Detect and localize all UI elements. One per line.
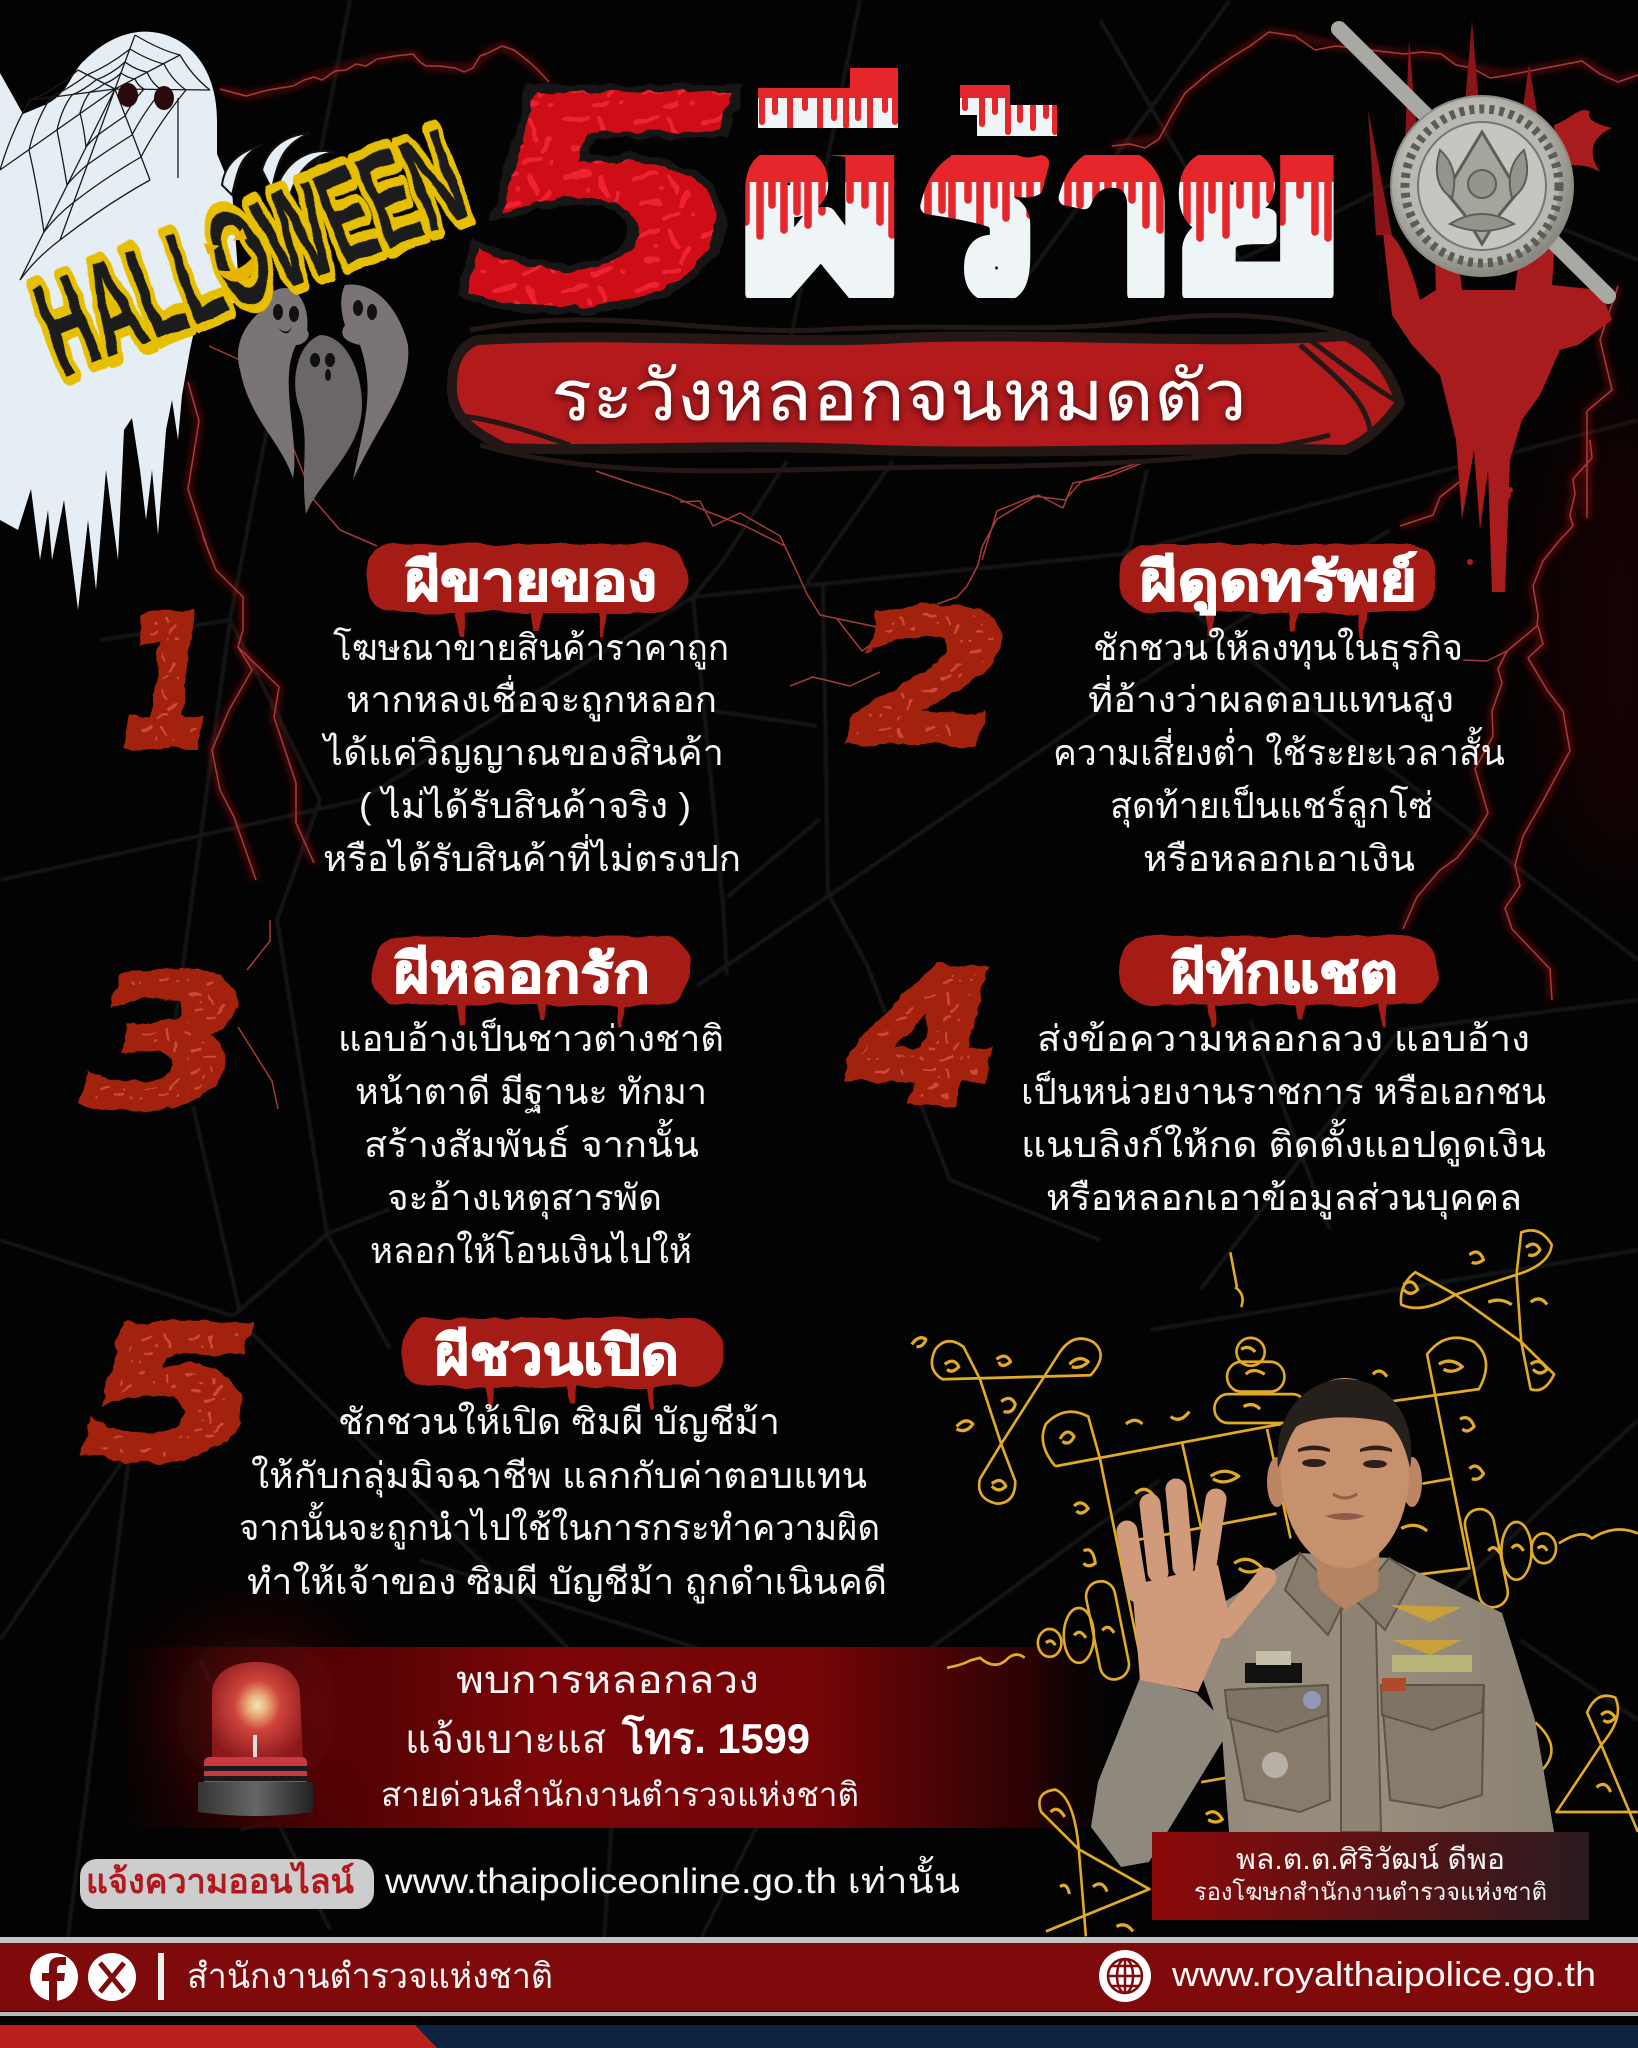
hair (1277, 1379, 1411, 1468)
body 1: โฆษณาขายสินค้าราคาถูก (333, 627, 729, 670)
pumpkin face (204, 227, 263, 289)
body 3: จะอ้างเหตุสารพัด (387, 1177, 662, 1220)
body 4: เป็นหน่วยงานราชการ หรือเอกชน (1021, 1069, 1546, 1112)
icon: facebook (30, 1953, 78, 2001)
panel 5 (84, 1291, 887, 1604)
body 3 (338, 1016, 724, 1271)
halloween badge (17, 103, 484, 404)
small grey ghosts (238, 284, 408, 514)
panel 4 (849, 935, 1546, 1220)
footer (0, 1937, 1638, 2048)
title letters: ผี (741, 80, 902, 340)
heading 5: ผีชวนเปิด (435, 1326, 679, 1386)
body 2 (1053, 627, 1505, 879)
body 2: สุดท้ายเป็นแชร์ลูกโซ่ (1110, 783, 1433, 828)
body 1: ได้แค่วิญญาณของสินค้า (321, 732, 724, 773)
name plate (1152, 1832, 1589, 1920)
sword (1339, 29, 1608, 296)
panel 3 (84, 936, 724, 1271)
red lightning lines (188, 32, 1638, 1109)
raised sleeve (1091, 1678, 1225, 1867)
hotline text (381, 1659, 859, 1813)
title letters: ร้ (921, 80, 1043, 340)
position: รองโฆษกสำนักงานตำรวจแห่งชาติ (1194, 1878, 1547, 1906)
yantra drawing (912, 1230, 1638, 1936)
body 1: หรือได้รับสินค้าที่ไม่ตรงปก (323, 834, 741, 879)
online report url: www.thaipoliceonline.go.th เท่านั้น (384, 1855, 960, 1901)
number 1: 1 (122, 578, 214, 787)
body 5: ให้กับกลุ่มมิจฉาชีพ แลกกับค่าตอบแทน (251, 1455, 867, 1498)
hand (1127, 1489, 1266, 1692)
body 1: ( ไม่ได้รับสินค้าจริง ) (359, 785, 691, 826)
icon: red siren (171, 1635, 341, 1816)
pockets and placket (1225, 1553, 1484, 1832)
heading 4: ผีทักแชต (1171, 944, 1398, 1004)
ears (1267, 1457, 1422, 1507)
hotline band (120, 1647, 1110, 1828)
number 3: 3 (84, 939, 246, 1148)
body 5: ชักชวนให้เปิด ซิมผี บัญชีม้า (338, 1401, 780, 1442)
body 4 (1021, 1018, 1546, 1220)
body 5 (239, 1401, 887, 1604)
subtitle banner (452, 315, 1400, 471)
number 2: 2 (848, 575, 1010, 784)
subtitle text: ระวังหลอกจนหมดตัว (551, 357, 1247, 435)
name: พล.ต.ต.ศิริวัฒน์ ดีพอ (1236, 1843, 1505, 1876)
body 1 (321, 627, 741, 879)
online report pill (80, 1859, 374, 1909)
title letters: ย (1168, 80, 1344, 340)
seal (1391, 96, 1573, 276)
finger streaks (1368, 20, 1540, 235)
heading pill 1 (366, 544, 687, 637)
body 4: หรือหลอกเอาข้อมูลส่วนบุคคล (1046, 1177, 1522, 1220)
heading 3: ผีหลอกรัก (394, 944, 650, 1004)
face features (1298, 1446, 1392, 1520)
hotline text: สายด่วนสำนักงานตำรวจแห่งชาติ (381, 1776, 859, 1813)
body 5: ทำให้เจ้าของ ซิมผี บัญชีม้า ถูกดำเนินคดี (247, 1561, 887, 1604)
heading 1: ผีขายของ (405, 552, 657, 612)
body 4: แนบลิงก์ให้กด ติดตั้งแอปดูดเงิน (1021, 1118, 1546, 1167)
title number 5: 5 (462, 35, 752, 372)
body 3: สร้างสัมพันธ์ จากนั้น (364, 1118, 699, 1165)
heading pill 3 (372, 936, 690, 1027)
title ghosts (745, 68, 1334, 298)
heading 2: ผีดูดทรัพย์ (1140, 551, 1417, 615)
hotline text: โทร. 1599 (621, 1714, 810, 1762)
badges (1245, 1605, 1472, 1778)
title tone marks (758, 68, 1057, 136)
blood hand print (1368, 20, 1612, 592)
body 2: ชักชวนให้ลงทุนในธุรกิจ (1093, 627, 1463, 670)
red glow right (1550, 400, 1638, 880)
body 3: หน้าตาดี มีฐานะ ทักมา (355, 1071, 707, 1114)
officer photo (1091, 1378, 1554, 1867)
hotline text: พบการหลอกลวง (456, 1659, 759, 1702)
head (1281, 1378, 1409, 1568)
footer website: www.royalthaipolice.go.th (1171, 1956, 1596, 1994)
heading pill 5 (402, 1318, 722, 1409)
neck (1310, 1530, 1380, 1610)
heading pill 2 (1119, 544, 1437, 637)
body 2: ความเสี่ยงต่ำ ใช้ระยะเวลาสั้น (1053, 726, 1505, 773)
red lightning glow (188, 32, 1638, 1000)
body 2: หรือหลอกเอาเงิน (1143, 838, 1415, 879)
number 4: 4 (849, 935, 998, 1144)
body 1: หากหลงเชื่อจะถูกหลอก (346, 675, 717, 722)
spider eyes (118, 83, 174, 110)
title letters: า (1056, 80, 1174, 340)
body 4: ส่งข้อความหลอกลวง แอบอ้าง (1037, 1018, 1530, 1059)
body 3: หลอกให้โอนเงินไปให้ (370, 1230, 692, 1271)
body 5: จากนั้นจะถูกนำไปใช้ในการกระทำความผิด (239, 1501, 880, 1550)
title letters (745, 155, 1334, 298)
ghost with spider web (0, 32, 335, 610)
icon: x (88, 1953, 136, 2001)
royal police seal and sword (1339, 29, 1608, 296)
spider web (0, 35, 210, 280)
icon: globe (1099, 1950, 1151, 2002)
number 5: 5 (84, 1291, 260, 1500)
body 2: ที่อ้างว่าผลตอบแทนสูง (1088, 675, 1454, 722)
body 3: แอบอ้างเป็นชาวต่างชาติ (338, 1016, 724, 1059)
hotline text: แจ้งเบาะแส (405, 1718, 606, 1762)
panel 1 (122, 544, 741, 879)
officer body (1200, 1553, 1554, 1832)
heading pill 4 (1119, 936, 1437, 1027)
online report pill: แจ้งความออนไลน์ (86, 1861, 354, 1901)
ghost claw (222, 133, 335, 195)
footer agency: สำนักงานตำรวจแห่งชาติ (187, 1957, 553, 1996)
panel 2 (848, 544, 1505, 879)
